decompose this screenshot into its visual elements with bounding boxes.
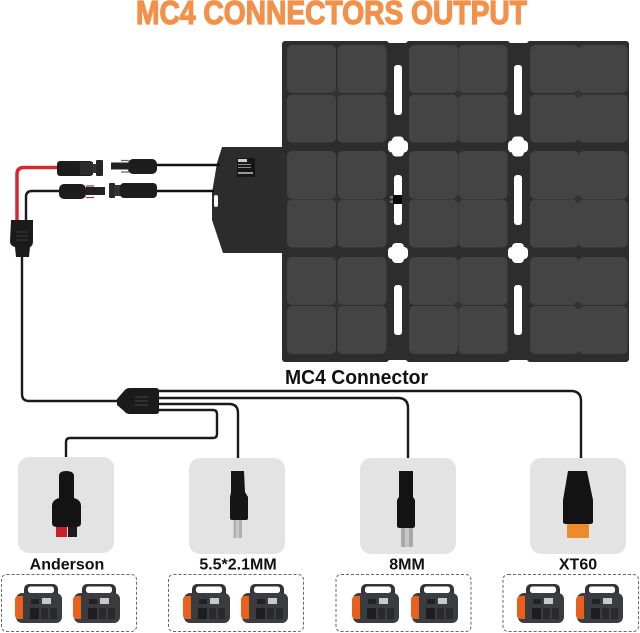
5.5*2.1MM cable — [155, 404, 238, 458]
MC4 connector upper right — [111, 159, 157, 174]
dashed box: Anderson stations — [2, 574, 136, 632]
connector label: MC4 Connector — [285, 367, 428, 389]
MC4 connector upper left — [57, 160, 103, 176]
barrel plug 5.5 — [230, 471, 248, 538]
XT60 plug — [563, 471, 593, 538]
panel frame — [282, 41, 629, 362]
black cable to lower connector — [26, 191, 60, 222]
XT60 cable — [155, 391, 581, 458]
card: 5.5*2.1MM — [189, 458, 285, 554]
tab handle slot — [214, 195, 218, 207]
dashed box: XT60 stations — [503, 574, 638, 632]
panel leads — [155, 165, 220, 191]
card: 8MM — [360, 458, 456, 554]
panel slots — [394, 65, 522, 335]
solar cells — [287, 45, 628, 354]
main trunk cable — [22, 255, 118, 401]
label: Anderson: Anderson — [30, 556, 104, 574]
splitter hub — [117, 388, 159, 414]
barrel plug 8mm — [397, 471, 415, 547]
junction tab — [212, 147, 284, 253]
red cable — [17, 168, 58, 222]
8MM cable — [155, 398, 408, 458]
Anderson cable — [66, 410, 217, 458]
dashed box: 8MM stations — [336, 574, 471, 632]
label: 5.5*2.1MM: 5.5*2.1MM — [199, 556, 277, 574]
cables — [17, 165, 581, 458]
label: 8MM: 8MM — [389, 556, 425, 574]
MC4 connector lower left — [59, 184, 105, 199]
dashed box: 5.5*2.1MM stations — [168, 574, 304, 632]
Y splitter top — [10, 220, 33, 257]
tab label plate — [237, 158, 255, 177]
card: Anderson — [18, 457, 114, 553]
cell junction marks — [334, 90, 582, 309]
cross cutouts — [388, 136, 528, 263]
MC4 connector lower right — [109, 183, 157, 198]
card: XT60 — [530, 458, 626, 554]
label: XT60: XT60 — [559, 556, 597, 574]
solar panel — [212, 41, 629, 362]
buckle clip — [390, 195, 402, 204]
Anderson plug — [52, 471, 81, 537]
edge notches — [387, 41, 529, 362]
